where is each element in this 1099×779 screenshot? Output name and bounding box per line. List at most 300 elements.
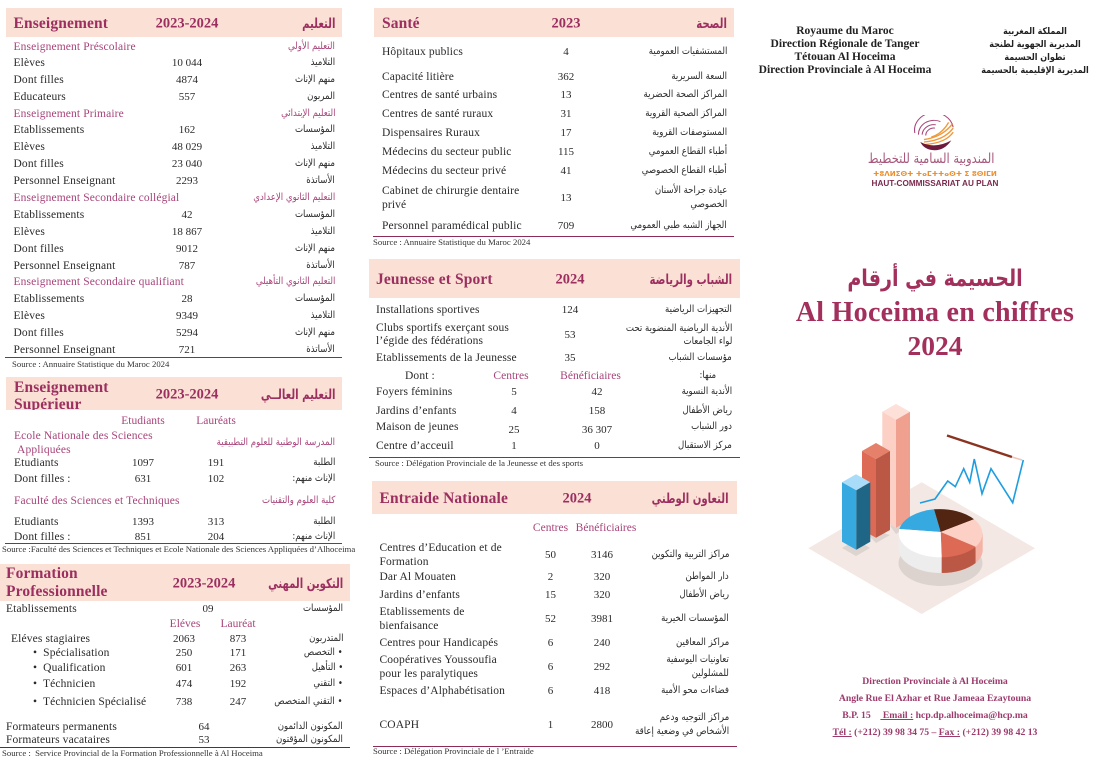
row: qualification: • Qualification [33,662,106,674]
source: Source : Délégation Provinciale de l ’Entraide [373,746,534,756]
row: capacité [373,68,734,84]
logo mark [913,115,955,151]
row: personnel: الأساتذة [306,344,335,355]
source: Source : Annuaire Statistique du Maroc 2024 [12,359,169,369]
logo text: arabic: المندوبية السامية للتخطيط [868,151,994,167]
institution name: french: Direction Provinciale à Al Hoceima [759,64,931,76]
row: jardins: 15 [545,589,556,601]
row: personnel: Personnel Enseignant [14,260,115,272]
heading: jeunesse et sport [369,259,740,298]
row: technicien: • التقني [314,678,343,689]
row: capacité: 362 [558,71,574,83]
heading: formation professionnelle: Formation [6,564,78,582]
column headers: Centres [533,522,568,534]
row: alphabétisation: فضاءات محو الأمية [661,685,729,696]
row: centres urbains [373,86,734,102]
row: dar al mouaten [372,568,737,584]
row: handicapés: 240 [594,637,610,649]
column headers [170,618,256,630]
row: centres ruraux: المراكز الصحية القروية [645,108,727,119]
institution name: french: Direction Régionale de Tanger [771,38,919,50]
row: clubs: لواء الجامعات [683,336,732,346]
row: dont filles: Dont filles [14,327,64,339]
column headers: Etudiants [121,414,165,426]
row: hôpitaux: المستشفيات العمومية [648,46,727,57]
heading: enseignement supérieur: 2023-2024 [156,386,218,402]
row: dont: Bénéficiaires [560,370,621,382]
subheading: collégial: التعليم الثانوي الإعدادي [253,192,335,203]
row: dont filles [14,530,335,542]
row: stagiaires: 873 [230,633,246,645]
row: jardins: رياض الأطفال [679,589,729,600]
heading: jeunesse et sport: 2024 [556,271,584,287]
subheading: faculté: كلية العلوم والتقنيات [262,494,335,506]
row: centres éducation: Formation [380,556,429,568]
row: educateurs [14,91,335,103]
heading: santé: Santé [382,14,420,32]
row: dar al mouaten: دار المواطن [686,571,729,582]
row: élèves [14,226,335,238]
row: centres éducation: 50 [545,549,556,561]
row: alphabétisation: Espaces d’Alphabétisation [380,685,505,697]
subheading: collégial [14,192,335,204]
heading: entraide nationale: التعاون الوطني [652,490,729,506]
row: formateurs permanents: المكونون الدائمون [278,721,343,732]
subheading: primaire: التعليم الإبتدائي [281,108,335,119]
row: etablissements: Etablissements [14,124,84,136]
row: coaph: الأشخاص في وضعية إعاقة [635,726,729,737]
row: centres éducation: Centres d’Education et de [380,542,502,554]
heading: formation professionnelle [0,564,350,601]
row: dont filles [14,327,335,339]
row: cabinet dentaire: Cabinet de chirurgie dentaire [382,185,519,197]
row: etablissements: 35 [564,352,576,364]
row: personnel: 2293 [176,175,198,187]
heading: jeunesse et sport: Jeunesse et Sport [376,270,493,288]
row: coaph [372,710,737,738]
row: clubs: 53 [564,328,576,340]
subheading: qualifiant: التعليم الثانوي التأهيلي [256,276,335,287]
row: dont filles: الإناث منهم: [292,530,335,542]
institution name: arabic: تطوان الحسيمة [1004,52,1066,63]
row: médecins public [373,142,734,158]
row: dispensaires [373,124,734,140]
row: élèves: 18 867 [172,226,202,238]
row: cabinet dentaire: عيادة جراحة الأسنان [655,185,727,196]
row: dar al mouaten: 320 [594,571,610,583]
row: élèves [14,141,335,153]
row: etudiants: 1393 [132,516,154,528]
row: educateurs: Educateurs [14,91,66,103]
row: dispensaires: 17 [560,127,572,139]
row: educateurs: 557 [179,91,195,103]
row: paramédical: الجهاز الشبه طبي العمومي [631,220,727,231]
row: qualification: 263 [230,662,246,674]
row: dont filles: Dont filles [14,74,64,86]
row: dont: Centres [493,370,529,382]
row: élèves: Elèves [14,57,45,69]
row: dont filles [14,473,335,485]
row: dont: Dont : [405,370,435,382]
row: élèves: التلاميذ [311,141,335,152]
row: élèves: Elèves [14,310,45,322]
row: qualification: • التأهيل [311,662,343,673]
heading: formation professionnelle: 2023-2024 [173,575,235,591]
heading: enseignement supérieur [6,377,342,410]
row: maison: 36 307 [582,424,612,436]
row: coaph: 2800 [591,719,613,731]
row: dont filles: 631 [135,473,151,485]
main title [780,262,1090,362]
row: centres éducation [372,540,737,568]
row: coopératives: تعاونيات اليوسفية [666,654,729,664]
row: clubs: الأندية الرياضية المنضوية تحت [626,322,732,334]
row: dont filles: 23 040 [172,158,202,170]
row: formateurs permanents: Formateurs permanents [6,721,117,733]
row: élèves: 48 029 [172,141,202,153]
row: etablissements: المؤسسات [295,124,335,135]
row: élèves: التلاميذ [311,226,335,237]
heading: santé: الصحة [696,16,727,32]
row: technicien: • Téchnicien [33,678,95,690]
subheading: école nationale: Appliquées [17,444,71,456]
row: centres ruraux: Centres de santé ruraux [382,108,493,120]
row: handicapés: Centres pour Handicapés [380,637,498,649]
row: bienfaisance: 3981 [591,613,613,625]
floor [808,482,1035,614]
source: Source : Service Provincial de la Formation Professionnelle à Al Hoceima [2,748,263,758]
row: etablissements: 42 [182,209,192,221]
row: etablissements: Etablissements [14,209,84,221]
column headers [372,518,737,534]
illustration: isometric charts [790,395,1050,625]
row: foyers: 42 [592,386,602,398]
heading: entraide nationale: 2024 [562,490,592,506]
row: etablissements: Etablissements [14,293,84,305]
row: spécialisation: 250 [176,647,192,659]
row: etablissements: المؤسسات [303,603,343,614]
subheading: faculté: Faculté des Sciences et Techniques [14,494,180,506]
row: coopératives: 292 [594,660,610,672]
row: dispensaires: المستوصفات القروية [652,127,727,138]
row: installations: Installations sportives [376,304,480,316]
institution name: french: Tétouan Al Hoceima [795,51,895,63]
row: dont filles [14,74,335,86]
row: dont filles: Dont filles [14,158,64,170]
heading: jeunesse et sport: الشباب والرياضة [649,272,732,288]
row: dont filles: Dont filles [14,243,64,255]
logo text: french: HAUT-COMMISSARIAT AU PLAN [872,179,998,188]
row: personnel: Personnel Enseignant [14,344,115,356]
row: centres urbains: المراكز الصحة الحضرية [643,89,727,100]
title: year: 2024 [908,330,962,361]
row: stagiaires: 2063 [173,633,195,645]
row: installations: 124 [562,304,578,316]
row: dont filles: منهم الإناث [295,158,335,169]
row: dont filles: 851 [135,530,151,542]
row: cabinet dentaire: الخصوصي [690,199,727,210]
bar: pink [882,404,910,528]
source: Source : Délégation Provinciale de la Jeunesse et des sports [375,458,583,468]
row: centres éducation: مراكز التربية والتكوين [651,549,729,560]
heading: enseignement: Enseignement [14,14,108,32]
row: dispensaires: Dispensaires Ruraux [382,127,480,139]
row: technicien [33,678,343,690]
row: etablissements [14,124,335,136]
heading: formation professionnelle: Professionnelle [6,582,108,600]
row: centres ruraux: 31 [560,108,572,120]
row: dont filles: Dont filles : [14,530,71,542]
row: formateurs permanents [6,721,343,733]
row: handicapés [372,634,737,650]
row: etudiants: الطلبة [313,516,335,526]
heading: entraide nationale [372,481,737,514]
row: etablissements: 162 [179,124,195,136]
row: centres urbains: Centres de santé urbains [382,89,497,101]
contact block: Direction Provinciale à Al Hoceima [862,676,1008,687]
subheading: préscolaire [14,40,335,52]
row: foyers: Foyers féminins [376,386,452,398]
row: paramédical: 709 [558,220,574,232]
row: clubs: l’égide des fédérations [376,334,483,346]
panel: santé [373,8,734,247]
row: etablissements [14,293,335,305]
row: stagiaires: Eléves stagiaires [11,633,90,645]
row: etudiants [14,457,335,469]
row: coopératives: Coopératives Youssoufia [380,654,497,666]
row: etablissements: المؤسسات [295,293,335,304]
row: coopératives [372,652,737,680]
logo text: tifinagh: ⵜⵓⴷⵍⵉⵙⵜ ⵜⴰⵎⵜⵜⴰⵙⵜ ⵉ ⵓⵙⵏⵎⵍ [873,169,997,178]
pencil [947,436,1022,460]
panel: enseignement [5,8,342,369]
panel: entraide nationale [372,481,737,757]
row: personnel: 787 [179,260,195,272]
row: dont filles: الإناث منهم: [292,473,335,484]
row: jardins: 320 [594,589,610,601]
row: coaph: 1 [548,719,553,731]
row: installations [369,300,740,316]
row: maison: 25 [508,424,520,436]
row: stagiaires [11,633,343,645]
row: installations: التجهيزات الرياضية [665,304,732,314]
row: dont filles: 102 [208,473,224,485]
row: élèves: التلاميذ [311,57,335,68]
row: dont filles [14,243,335,255]
row: jardins [372,586,737,602]
panel: enseignement supérieur [2,377,356,554]
institution name: arabic: المديرية الإقليمية بالحسيمة [981,65,1089,76]
row: centre accueil [369,437,740,453]
subheading: préscolaire: التعليم الأولي [288,40,335,52]
row: alphabétisation: 6 [548,685,553,697]
row: dont [369,367,740,383]
row: jardins: 4 [511,405,517,417]
row: coopératives: pour les paralytiques [380,668,478,680]
row: paramédical: Personnel paramédical public [382,220,522,232]
contact block: B.P. 15 Email : hcp.dp.alhoceima@hcp.ma [842,710,1028,721]
row: centre accueil: Centre d’acceuil [376,440,454,452]
row: etablissements: Etablissements [6,603,77,615]
heading: enseignement: 2023-2024 [156,15,218,31]
row: personnel [14,174,335,187]
row: formateurs vacataires [6,734,343,746]
row: handicapés: 6 [548,637,553,649]
row: dont filles: منهم الإناث [295,243,335,254]
row: formateurs vacataires: المكونون المؤقتون [276,734,343,745]
row: élèves: التلاميذ [311,310,335,321]
row: etablissements [14,209,335,221]
row: etablissements: 28 [182,293,192,305]
institution name: french [745,25,945,77]
row: educateurs: المربون [307,91,335,102]
row: spécialisation: • Spécialisation [33,647,110,659]
row: maison: Maison de jeunes [376,421,459,433]
heading: enseignement: التعليم [302,16,335,32]
row: spécialisation: 171 [230,647,246,659]
subheading: école nationale: المدرسة الوطنية للعلوم التطبيقية [217,437,335,448]
row: foyers: 5 [511,386,517,398]
row: élèves: 10 044 [172,57,202,69]
subheading: collégial: Enseignement Secondaire collégial [14,192,179,204]
row: etablissements [6,603,343,615]
row: personnel [14,258,335,272]
row: médecins privé: أطباء القطاع الخصوصي [642,165,727,176]
row: médecins privé [373,162,734,178]
row: etablissements: المؤسسات [295,209,335,220]
column headers [121,414,236,426]
row: personnel: Personnel Enseignant [14,175,115,187]
institution name: arabic: المديرية الجهوية لطنجة [989,39,1081,50]
row: centre accueil: 0 [594,440,600,452]
subheading: primaire [14,108,335,120]
row: bienfaisance [372,604,737,632]
row: etudiants: Etudiants [14,457,59,469]
row: maison: دور الشباب [691,421,732,432]
row: jardins [369,402,740,418]
row: alphabétisation [372,682,737,698]
row: maison [369,418,740,434]
row: handicapés: مراكز المعاقين [676,637,729,648]
row: médecins public: Médecins du secteur public [382,146,512,158]
contact block: Tél : (+212) 39 98 34 75 – Fax : (+212) 39 98 42 13 [833,727,1037,738]
row: etudiants: Etudiants [14,516,59,528]
row: etablissements: 09 [202,603,214,615]
heading: santé [374,8,734,37]
row: etudiants: الطلبة [313,457,335,468]
row: bienfaisance: المؤسسات الخيرية [661,613,729,624]
row: etablissements [369,349,740,365]
logo: haut-commissariat au plan [865,108,1005,193]
source: Source : Annuaire Statistique du Maroc 2024 [373,237,530,247]
contact block [780,673,1090,741]
row: etudiants: 191 [208,457,224,469]
row: élèves [14,310,335,322]
column headers: Lauréats [196,414,236,426]
row: formateurs vacataires: 53 [198,734,210,746]
institution name: french: Royaume du Maroc [796,25,894,37]
row: qualification [33,660,343,674]
row: technicien spécialisé: 738 [176,696,192,708]
row: etablissements: Etablissements de la Jeunesse [376,352,517,364]
heading: santé: 2023 [552,15,580,31]
row: centres ruraux [373,105,734,121]
row: élèves: 9349 [176,310,198,322]
row: capacité: Capacité litière [382,71,454,83]
row: personnel: الأساتذة [306,260,335,271]
row: spécialisation [33,647,343,659]
row: jardins: Jardins d’enfants [380,589,460,601]
bar: blue [842,474,870,550]
row: centres urbains: 13 [560,89,572,101]
heading: enseignement supérieur: التعليم العالــي [260,386,335,402]
row: technicien spécialisé: • Téchnicien Spécialisé [33,696,146,708]
row: élèves [14,57,335,69]
row: jardins: رياض الأطفال [682,405,732,416]
row: bienfaisance: bienfaisance [380,620,439,632]
subheading: école nationale: Ecole Nationale des Sciences [14,430,153,442]
row: etudiants: 313 [208,516,224,528]
row: dont filles: Dont filles : [14,473,71,485]
row: personnel: 721 [179,344,195,356]
row: clubs [369,320,740,348]
row: etablissements: مؤسسات الشباب [669,352,732,363]
bar shadows [842,522,908,556]
row: cabinet dentaire: 13 [560,192,572,204]
row: coopératives: 6 [548,660,553,672]
row: dont filles: منهم الإناث [295,327,335,338]
row: formateurs permanents: 64 [198,721,210,733]
row: bienfaisance: 52 [545,613,556,625]
row: médecins public: 115 [558,146,574,158]
contact block: Angle Rue El Azhar et Rue Jameaa Ezaytouna [839,693,1031,704]
row: coopératives: للمشلولين [692,668,729,678]
row: alphabétisation: 418 [594,685,610,697]
row: personnel [14,342,335,356]
row: hôpitaux [382,46,727,58]
row: dar al mouaten: Dar Al Mouaten [380,571,456,583]
row: dont: منها: [699,370,716,381]
subheading: primaire: Enseignement Primaire [14,108,124,120]
row: coaph: مراكز التوجيه ودعم [660,712,729,723]
row: centre accueil: 1 [511,440,517,452]
row: élèves: Elèves [14,141,45,153]
pie chart [898,509,983,586]
row: hôpitaux: 4 [563,46,569,58]
row: etudiants [14,516,335,528]
column headers: Lauréat [220,618,256,630]
title: arabic: الحسيمة في أرقام [847,266,1023,292]
column headers: Bénéficiaires [576,522,636,534]
bar: red [862,443,890,538]
row: jardins: Jardins d’enfants [376,405,456,417]
row: foyers [369,383,740,399]
subheading: préscolaire: Enseignement Préscolaire [14,40,136,52]
subheading: qualifiant: Enseignement Secondaire qualifiant [14,276,184,288]
panel: formation professionnelle [0,564,350,758]
row: dont filles: 5294 [176,327,198,339]
row: cabinet dentaire: privé [382,199,406,211]
row: médecins public: أطباء القطاع العمومي [649,146,727,156]
row: technicien: 192 [230,678,246,690]
institution name: arabic: المملكة المغربية [1003,26,1067,37]
row: etudiants: 1097 [132,457,154,469]
row: technicien spécialisé: 247 [230,696,246,708]
row: dont filles: 9012 [176,243,198,255]
column headers: Eléves [170,618,200,630]
row: dont filles: 204 [208,530,224,542]
row: paramédical [373,217,734,233]
